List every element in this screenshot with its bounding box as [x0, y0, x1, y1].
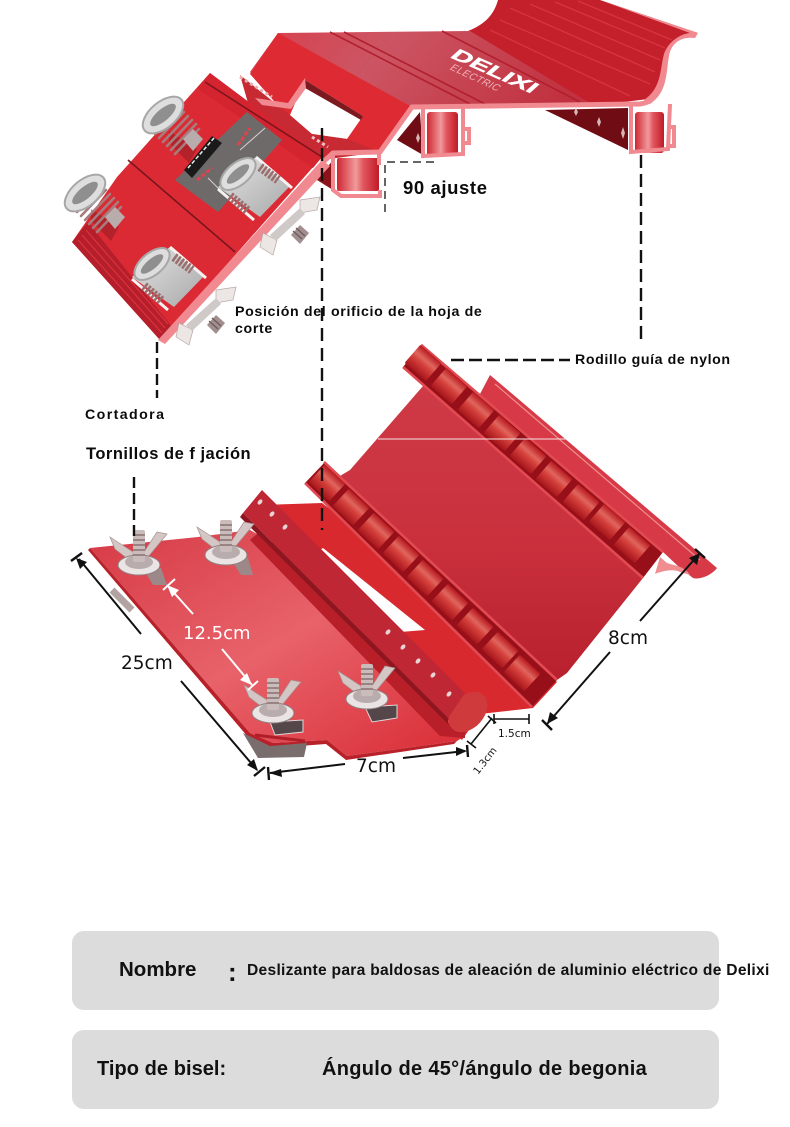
slotted rail	[240, 490, 465, 724]
dimension: 1.5cm	[494, 714, 531, 740]
dashed guide: nylon roller top	[640, 155, 642, 345]
label: blade hole position: corte	[235, 321, 273, 337]
roller rail, rear	[403, 344, 663, 578]
top device: cutter plate	[72, 73, 330, 344]
window opening	[240, 75, 380, 160]
top device: middle plate	[250, 31, 590, 153]
fixing bolts, top device	[58, 90, 320, 345]
clamp underneath	[112, 590, 307, 758]
dimension: 25cm	[71, 553, 265, 776]
adjustment label plate	[175, 112, 282, 212]
dimension: 7cm: 7cm	[356, 756, 396, 777]
product name value: Deslizante para baldosas de aleación de aluminio eléctrico de Delixi	[247, 962, 770, 979]
label: 90 ajuste: 90 ajuste	[403, 177, 488, 198]
logo: ELECTRIC	[447, 63, 503, 94]
label: nylon roller: Rodillo guía de nylon	[575, 352, 731, 368]
bevel value: Ángulo de 45°/ángulo de begonia	[322, 1058, 647, 1080]
dimension: 25cm: 25cm	[121, 653, 173, 674]
dimension: 7cm	[268, 745, 468, 780]
name heading: Nombre	[119, 958, 196, 981]
dimension: 8cm: 8cm	[608, 628, 648, 649]
dimension: 1.5cm: 1.5cm	[498, 728, 531, 740]
bottom device: centre panel	[340, 386, 643, 680]
dimension: 12.5cm: 12.5cm	[183, 623, 251, 644]
bottom device: base behind rollers	[262, 503, 557, 740]
dashed guide: fixing screws	[133, 477, 135, 540]
roller rail, front	[305, 462, 557, 707]
dashed guide: 90 adjustment	[385, 162, 434, 212]
scan line	[378, 438, 566, 440]
dashed guide: nylon roller side	[451, 359, 570, 361]
dashed guide: blade hole	[321, 128, 323, 530]
panel: bevel type	[72, 1030, 719, 1109]
bottom device: gutter lip	[480, 375, 717, 578]
label: blade hole position: Posición del orificio de la hoja de	[235, 304, 482, 320]
bevel heading: Tipo de bisel:	[97, 1058, 226, 1080]
wing nuts, bottom device	[110, 520, 397, 735]
logo: DELIXI	[446, 46, 544, 97]
top device: rollers and end profile	[317, 99, 674, 196]
colon marker: :	[228, 957, 237, 987]
top device: gutter	[468, 0, 698, 106]
roller under rail	[441, 684, 495, 740]
panel: product name	[72, 931, 719, 1010]
dimension: 12.5cm	[163, 579, 258, 690]
dimension: 8cm	[542, 549, 705, 730]
dimension: 1.3cm	[467, 716, 500, 777]
dimension: 1.3cm: 1.3cm	[472, 746, 500, 777]
dashed guide: cutter	[156, 342, 158, 398]
label: fixing screws: Tornillos de f jación	[86, 445, 251, 463]
label: cutter: Cortadora	[85, 407, 165, 423]
bottom device: base plate	[88, 530, 465, 760]
